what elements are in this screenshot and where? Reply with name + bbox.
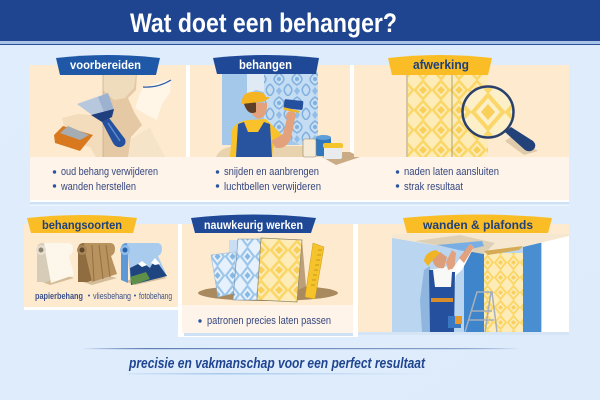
text block: wanden herstellen: [60, 181, 136, 193]
footer tagline: precisie en vakmanschap voor een perfect resultaat: [128, 356, 426, 372]
icon: stripped wall and torn wallpaper: [62, 74, 171, 157]
text block: naden laten aansluiten: [404, 166, 499, 178]
text block: wallpaper types: papierbehang: [35, 291, 83, 302]
ribbon: voorbereiden: [56, 55, 160, 75]
ribbon: afwerking: [388, 55, 492, 75]
text block: wallpaper types: fotobehang: [139, 291, 172, 301]
header band: [0, 0, 600, 45]
icon: ruler: [305, 243, 324, 299]
icon: pattern samples: [198, 238, 338, 302]
text block: patronen precies laten passen: [207, 315, 331, 327]
title: Wat doet een behanger?: [130, 8, 397, 38]
text block: wallpaper types: [35, 291, 172, 302]
text block: [396, 166, 499, 193]
ribbon: behangen: behangen: [239, 58, 292, 72]
ribbon: behangsoorten: behangsoorten: [42, 220, 122, 232]
icon: magnifying glass: [462, 86, 538, 155]
ribbon: voorbereiden: voorbereiden: [70, 58, 141, 72]
text block: oud behang verwijderen: [61, 166, 158, 178]
ribbon: wanden en plafonds: [403, 214, 552, 233]
icon: wall with patterned wallpaper: [216, 72, 345, 157]
ribbon: behangen: [213, 55, 319, 74]
panel: wanden en plafonds: [358, 224, 569, 335]
text block: strak resultaat: [404, 181, 463, 193]
ribbon: nauwkeurig werken: nauwkeurig werken: [204, 220, 303, 232]
text block: snijden en aanbrengen: [224, 166, 319, 178]
panel: behangsoorten: [24, 224, 178, 310]
panel: behangen: [190, 65, 360, 193]
ribbon: wanden en plafonds: wanden & plafonds: [422, 218, 533, 232]
footer divider: [82, 348, 520, 349]
icon: scraper: [77, 93, 126, 147]
text block: [53, 166, 158, 193]
text block: luchtbellen verwijderen: [224, 181, 321, 193]
icon: worker with brush: [230, 92, 303, 157]
ribbon: afwerking: afwerking: [413, 58, 469, 72]
icon: sponge: [54, 126, 93, 151]
icon: worker on ceiling: [420, 244, 474, 332]
text block: [216, 166, 321, 193]
icon: paper roll: [36, 243, 74, 285]
ribbon: behangsoorten: [27, 215, 137, 233]
icon: wallpaper strips: [407, 72, 488, 157]
icon: step ladder: [465, 292, 497, 332]
panel: afwerking: [354, 65, 569, 193]
panel: voorbereiden: [30, 65, 190, 193]
icon: photo wallpaper roll: [120, 243, 167, 285]
icon: roll and paint cans: [303, 135, 360, 165]
top row base: [30, 157, 569, 206]
text block: wallpaper types: vliesbehang: [93, 291, 131, 302]
icon: room scene: [392, 234, 569, 332]
panel: nauwkeurig werken: [178, 224, 358, 337]
icon: fleece roll: [77, 243, 117, 285]
ribbon: nauwkeurig werken: [191, 214, 316, 233]
